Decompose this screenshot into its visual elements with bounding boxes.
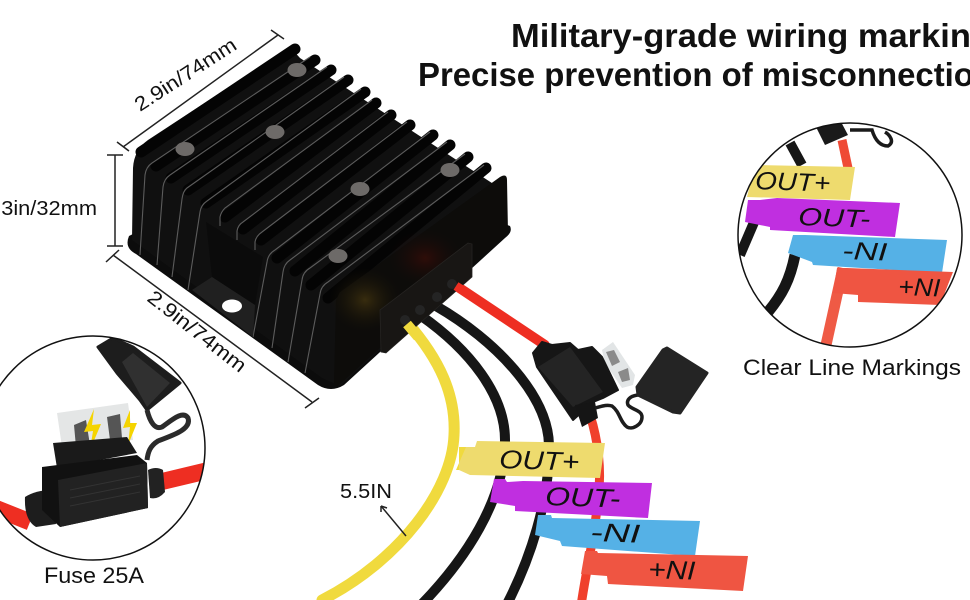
dimension: top width: 2.9in/74mm <box>131 34 241 116</box>
clear fuse blade <box>57 403 133 442</box>
cooling fins <box>141 49 486 298</box>
strap <box>595 395 642 428</box>
notch back wall <box>206 222 263 305</box>
dimension: bottom width: 2.9in/74mm <box>143 287 250 377</box>
connector plate <box>380 243 472 353</box>
label: Fuse 25A: Fuse 25A <box>44 563 144 588</box>
title <box>418 18 970 94</box>
base flange <box>128 150 511 389</box>
grey screw caps <box>176 63 460 263</box>
dimension: bottom width <box>106 250 319 408</box>
inline fuse holder with cap <box>533 342 707 428</box>
wire tag: OUT+: OUT+ <box>499 444 580 477</box>
wire tag: -NI <box>535 515 700 556</box>
fuse collar <box>53 437 137 468</box>
fuse body <box>42 455 148 527</box>
length callout: 5.5IN <box>340 481 406 536</box>
fin highlights and descending ribs <box>140 57 484 373</box>
mounting hole <box>222 300 242 312</box>
length callout: 5.5IN: 5.5IN <box>340 481 392 503</box>
circle callout: fuse <box>0 336 210 560</box>
wire tag: OUT-: OUT- <box>545 481 621 514</box>
rubber sleeves <box>25 490 56 527</box>
mounting plate <box>192 277 255 337</box>
wire tag: +NI <box>581 551 748 591</box>
circle callout: wire markings: -NI <box>842 237 888 267</box>
body silhouette <box>132 47 508 386</box>
circle callout: wire markings: OUT- <box>798 203 871 234</box>
wire tag: +NI: +NI <box>648 554 696 586</box>
label: Clear Line Markings: Clear Line Markings <box>743 355 961 380</box>
strap <box>147 410 188 460</box>
wire stubs at connector <box>407 286 470 337</box>
circle callout: wire markings: OUT+ <box>755 167 831 198</box>
title: Military-grade wiring marking <box>511 18 970 55</box>
wire tag: OUT- <box>490 479 652 518</box>
converter heat-sink module <box>128 47 511 389</box>
dimension: height <box>0 155 123 246</box>
clear fuse <box>602 342 635 388</box>
sleeve <box>575 402 598 427</box>
circle callout: wire markings: +NI <box>898 273 941 302</box>
dimension: top width <box>117 30 284 151</box>
wire tag: -NI: -NI <box>590 517 641 549</box>
fuse cap <box>98 338 180 410</box>
red wires <box>0 470 210 522</box>
circle callout: wire markings <box>738 120 962 347</box>
wire tag: OUT+ <box>456 441 605 478</box>
holder body <box>533 342 618 420</box>
end panel <box>334 176 508 386</box>
wires: yellow, black, red from converter <box>322 285 600 600</box>
cap <box>637 348 707 413</box>
lightning bolts <box>84 409 101 440</box>
